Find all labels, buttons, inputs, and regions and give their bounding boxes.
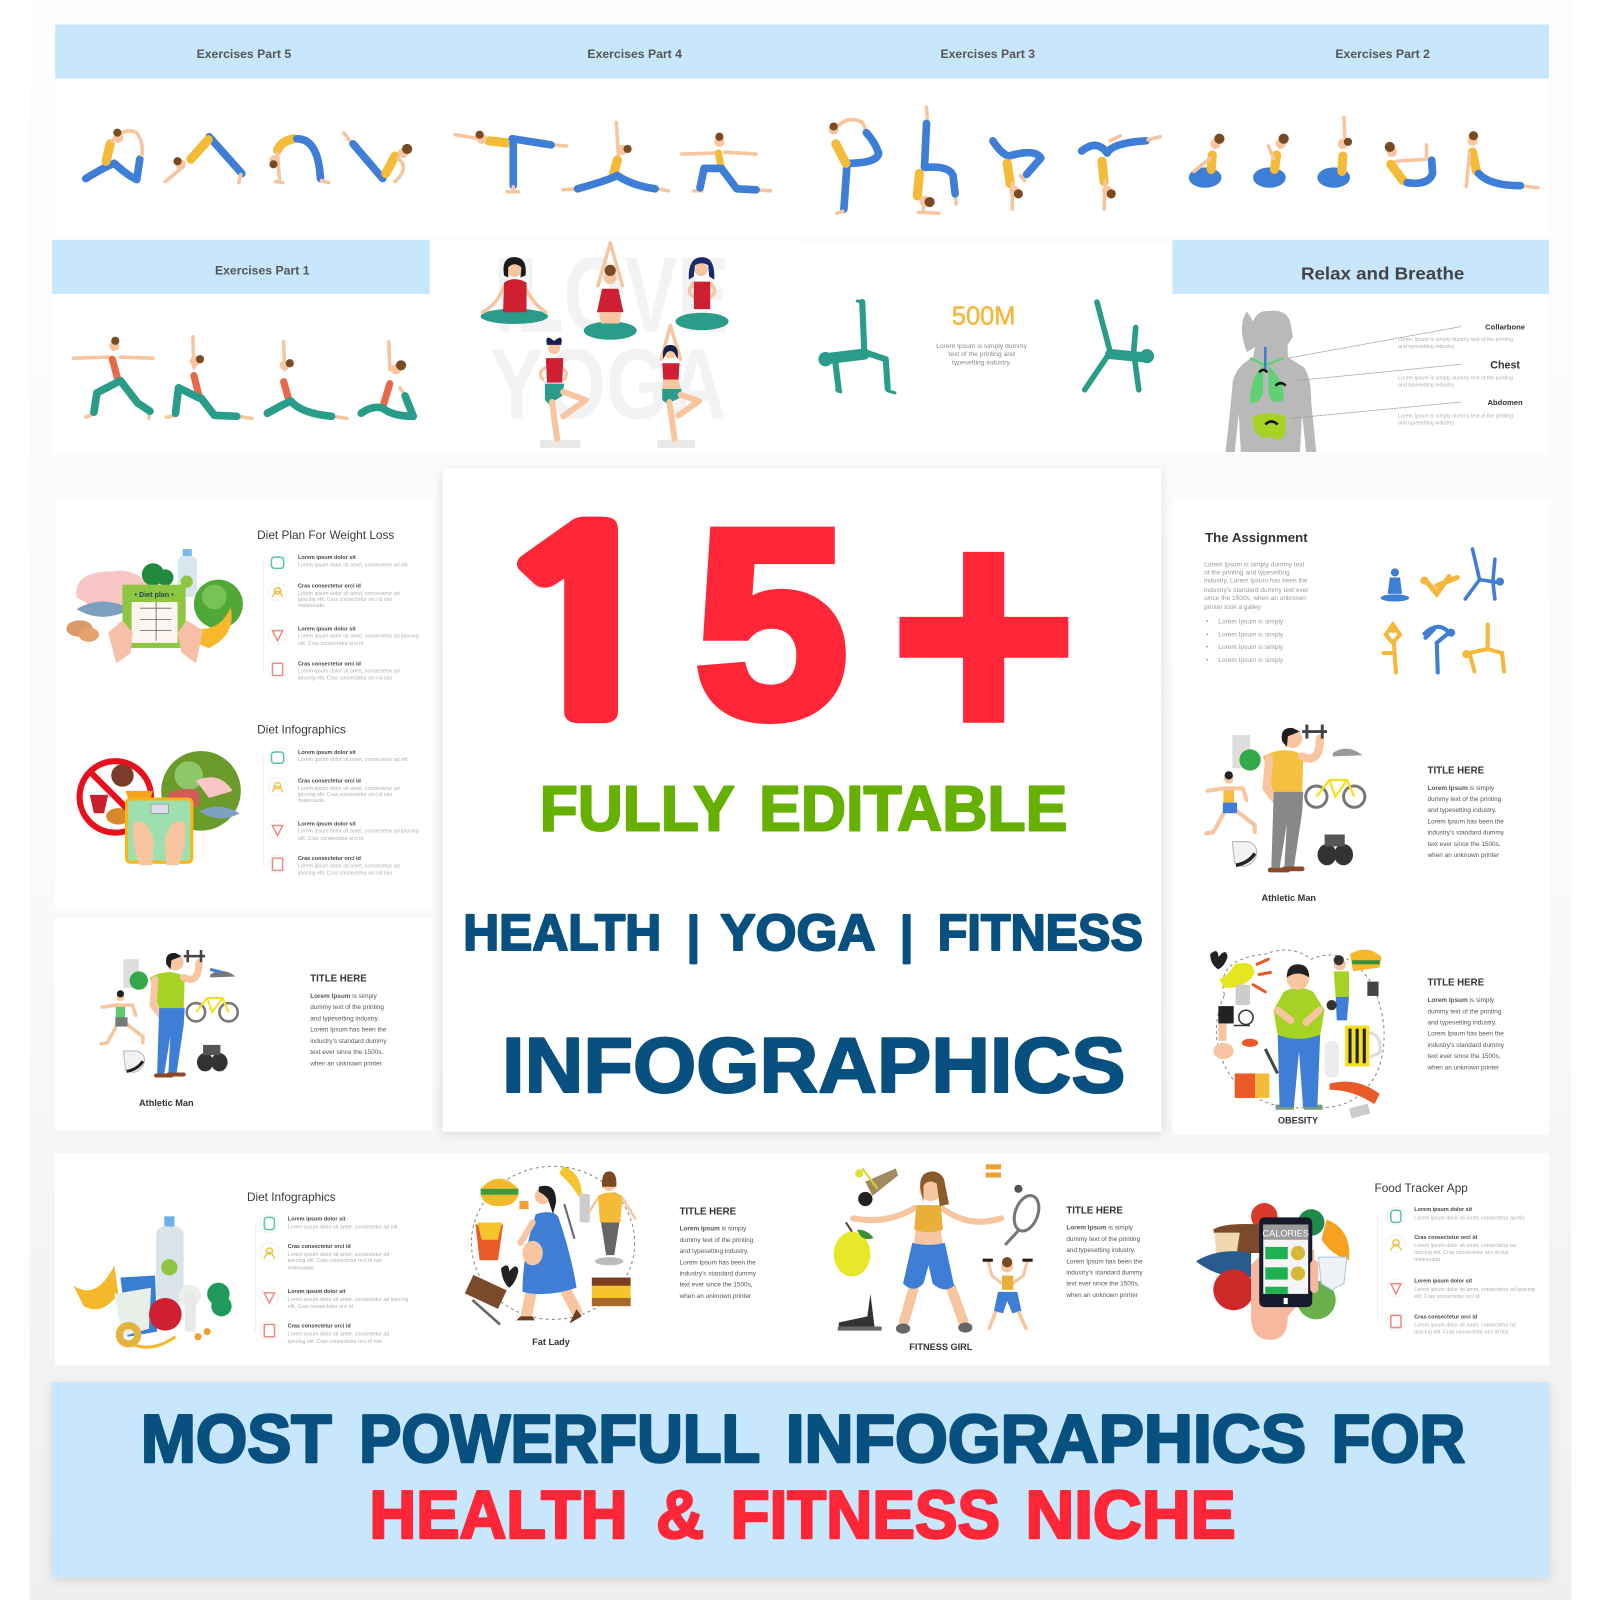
text block: diet infographics bottom: Lorem ipsum dolor sit (288, 1216, 346, 1222)
text block: diet infographics bottom: ipiscing elit. Cras consectetur orci id nisi (288, 1339, 382, 1345)
text block: the assignment: Lorem Ipsum is simply dummy text (1204, 561, 1305, 568)
panel: 500M stat (801, 243, 1172, 454)
text block: food tracker app: ipiscing elit. Cras consectetur orci id nisi (1414, 1250, 1508, 1256)
text block: diet infographics bottom: Cras consectetur orci id (288, 1324, 351, 1330)
text block: diet infographics: Lorem ipsum dolor sit (298, 750, 356, 756)
panel: bottom row (55, 1153, 1549, 1365)
text block: food tracker app: Food Tracker App (1374, 1181, 1468, 1195)
stat description: typesetting industry. (952, 359, 1011, 366)
text block: title here: when an unknown printer (309, 1060, 383, 1067)
text block: title here fat lady: Lorem Ipsum is simply (680, 1226, 747, 1233)
subtitle: health yoga fitness: YOGA (720, 904, 876, 961)
text block: title here (309, 974, 387, 1067)
header bar: exercises parts 5 to 2 (55, 24, 1549, 79)
text block: title here fitness girl: Lorem Ipsum has been the (1066, 1258, 1143, 1265)
text block: diet plan for weight loss: Lorem ipsum dolor sit (298, 555, 356, 561)
text block: title here fitness girl: dummy text of the printing (1066, 1236, 1140, 1243)
icons: six yoga silhouettes (1381, 549, 1504, 672)
headline line 1: POWERFULL (359, 1402, 760, 1477)
illustration: diet infographics with scale (80, 751, 241, 865)
subtitle: health yoga fitness: | (687, 906, 700, 964)
text block: title here obesity: dummy text of the printing (1428, 1008, 1502, 1015)
subtitle: health yoga fitness (463, 904, 1143, 964)
text block: title here fitness girl: Lorem Ipsum is simply (1066, 1225, 1134, 1232)
text block: diet plan for weight loss: Diet Plan For Weight Loss (257, 528, 394, 542)
silhouette: left teal yoga pose (818, 301, 895, 393)
stat description: Lorem Ipsum is simply dummy (936, 343, 1028, 350)
callout: collarbone: Lorem Ipsum is simply dummy text of the printing (1398, 337, 1513, 343)
text block: diet infographics: ipiscing elit. Cras consectetur orci id nisi (298, 870, 392, 876)
panel: left column (55, 500, 433, 908)
text block: the assignment: • (1206, 644, 1209, 651)
subtitle: fully editable (540, 773, 1067, 845)
headline line 2: HEALTH (369, 1478, 628, 1553)
text block: diet infographics bottom: ipiscing elit. Cras consectetur orci id nisi (288, 1258, 382, 1264)
text block: title here athletic: and typesetting industry. (1428, 807, 1497, 814)
text block: title here athletic: Lorem Ipsum has been the (1428, 818, 1504, 825)
panel: center headline card (443, 451, 1161, 1132)
big number: 15+: 1 (484, 502, 683, 753)
headline line 1: INFOGRAPHICS (786, 1402, 1306, 1477)
watermark text: I love yoga: YOGA (490, 328, 727, 440)
text block: diet plan for weight loss: Lorem ipsum dolor sit (298, 627, 356, 633)
text block: the assignment: printer took a galley (1204, 604, 1262, 611)
text block: diet infographics: ipiscing elit. Cras consectetur orci id nisi (298, 792, 392, 798)
text block: diet plan for weight loss: Cras consectetur orci id (298, 661, 361, 667)
headline line 1 (141, 1402, 1465, 1477)
text block: diet infographics bottom (247, 1190, 409, 1345)
text block: title here: Lorem Ipsum is simply (310, 993, 378, 1000)
illustration: food tracker app: CALORIES (1263, 1229, 1309, 1239)
illustration: obesity (1210, 950, 1384, 1119)
text block: diet plan for weight loss: ipiscing elit. Cras consectetur orci id nisi (298, 676, 392, 682)
text block: title here: TITLE HERE (310, 974, 367, 985)
callout lines (1288, 327, 1461, 418)
text block: the assignment: • (1206, 657, 1209, 664)
text block: diet infographics: Lorem ipsum dolor sit amet, consectetur ad (298, 863, 400, 869)
illustration: food tracker app (1196, 1203, 1349, 1340)
text block: the assignment: The Assignment (1205, 530, 1308, 545)
text block: diet infographics bottom: Lorem ipsum dolor sit amet, consectetur ad (288, 1332, 389, 1338)
text block: the assignment: industry's standard dummy text ever (1204, 587, 1309, 594)
watermark text: I love yoga: ILOVE (494, 235, 730, 355)
text block: title here: Lorem Ipsum has been the (310, 1027, 387, 1034)
text block: diet plan for weight loss: malesuada. (298, 603, 325, 609)
text block: diet plan for weight loss: Lorem ipsum dolor sit amet, consectetur ad (298, 668, 400, 674)
illustration: fat lady (465, 1166, 636, 1324)
text block: title here fitness girl: TITLE HERE (1066, 1205, 1123, 1216)
headline line 2: FITNESS (731, 1478, 1000, 1553)
panel: top exercises row (55, 24, 1549, 235)
text block: diet infographics: Diet Infographics (257, 723, 346, 737)
text block: diet infographics: malesuada. (298, 798, 325, 804)
text block: title here fat lady: when an unknown printer (679, 1293, 752, 1300)
callout: collarbone: and typesetting industry. (1398, 344, 1455, 350)
text block: title here obesity: TITLE HERE (1428, 978, 1485, 989)
headline line 1: MOST (141, 1402, 332, 1477)
caption: obesity: OBESITY (1278, 1115, 1318, 1125)
text block: diet plan for weight loss: Lorem ipsum dolor sit amet, consectetur ad ipiscing (298, 634, 419, 640)
text block: title here fitness girl: when an unknown printer (1065, 1292, 1139, 1299)
callout: chest: Chest (1490, 359, 1520, 371)
subtitle: health yoga fitness: HEALTH (463, 904, 661, 961)
text block: food tracker app: ipiscing elit. Cras consectetur orci id nisi (1414, 1330, 1508, 1336)
header bar: exercises parts 5 to 2: Exercises Part 5 (197, 47, 291, 61)
caption: athletic man: Athletic Man (139, 1098, 194, 1108)
text block: diet infographics: elit. Cras consectetur orci id (298, 836, 363, 842)
text block: title here fat lady: Lorem Ipsum has been the (680, 1259, 756, 1266)
text block: title here fat lady: and typesetting industry. (680, 1248, 749, 1255)
text block: diet plan for weight loss (257, 528, 419, 682)
panel: love yoga women (439, 235, 801, 454)
callout: abdomen: Abdomen (1487, 398, 1523, 407)
text block: title here fat lady: text ever since the 1500s, (680, 1282, 753, 1289)
text block: title here fat lady: dummy text of the printing (680, 1237, 754, 1244)
text block: title here: industry's standard dummy (310, 1038, 387, 1045)
text block: the assignment: of the printing and typesetting (1204, 569, 1290, 576)
header bar: exercises parts 5 to 2: Exercises Part 3 (940, 47, 1035, 61)
text block: the assignment: Lorem Ipsum is simply (1218, 644, 1284, 651)
illustration: healthy food (73, 1216, 232, 1347)
figure: tree pose woman 4 (540, 338, 586, 448)
header bar: exercises part 1 (52, 240, 430, 294)
text block: title here fat lady: TITLE HERE (680, 1206, 737, 1217)
text block: title here fat lady: industry's standard dummy (680, 1271, 757, 1278)
panel: relax and breathe (1172, 240, 1549, 454)
silhouette: right teal yoga pose (1085, 302, 1154, 390)
text block: title here: and typesetting industry. (310, 1015, 379, 1022)
text block: diet plan for weight loss: Cras consectetur orci id (298, 584, 361, 590)
header bar: relax and breathe (1172, 240, 1549, 294)
text block: title here fitness girl: industry's standard dummy (1066, 1269, 1143, 1276)
headline line 2: & (656, 1478, 704, 1553)
text block: title here obesity: text ever since the 1500s, (1428, 1053, 1501, 1060)
text block: diet plan for weight loss: Lorem ipsum dolor sit amet, consectetur ad elit. (298, 562, 409, 568)
text block: title here athletic: text ever since the 1500s, (1428, 841, 1501, 848)
stat description: text of the printing and (948, 351, 1015, 358)
caption: athletic man right: Athletic Man (1262, 893, 1316, 903)
panel: athletic man green (55, 918, 433, 1131)
text block: title here athletic: when an unknown printer (1427, 852, 1500, 859)
caption: fat lady: Fat Lady (532, 1337, 571, 1347)
text block: title here athletic: TITLE HERE (1428, 765, 1485, 776)
title: infographics: INFOGRAPHICS (502, 1023, 1126, 1109)
text block: food tracker app: Cras consectetur orci id (1414, 1235, 1477, 1241)
callout: abdomen: Lorem Ipsum is simply dummy text of the printing (1398, 413, 1513, 419)
text block: title here obesity: when an unknown printer (1427, 1064, 1500, 1071)
illustration: fitness girl (834, 1164, 1043, 1334)
text block: food tracker app: malesuada. (1414, 1257, 1442, 1263)
text block: food tracker app: Lorem ipsum dolor sit amet, consectetur ad elit. (1414, 1215, 1526, 1221)
text block: diet infographics bottom: Lorem ipsum dolor sit amet, consectetur ad elit. (288, 1225, 399, 1231)
text block: diet infographics bottom: malesuada. (288, 1265, 315, 1271)
text block: the assignment: since the 1500s, when an unknown (1204, 595, 1306, 602)
text block: diet infographics: Lorem ipsum dolor sit amet, consectetur ad elit. (298, 757, 409, 763)
text block: diet plan for weight loss: elit. Cras consectetur orci id (298, 641, 363, 647)
figures: exercises part 3 (829, 107, 1160, 213)
text block: food tracker app: Lorem ipsum dolor sit amet, consectetur ad (1414, 1243, 1516, 1249)
panel: right column (1172, 500, 1549, 1135)
text block: title here obesity: Lorem Ipsum is simply (1428, 997, 1495, 1004)
text block: diet plan for weight loss: ipiscing elit. Cras consectetur orci id nisi (298, 597, 392, 603)
stat description (936, 343, 1028, 366)
headline line 2 (369, 1478, 1236, 1553)
text block: the assignment: Lorem Ipsum is simply (1218, 618, 1284, 625)
watermark text: I love yoga (490, 235, 730, 440)
text block: the assignment: Lorem Ipsum is simply (1218, 632, 1284, 639)
figure: seated woman 3 (676, 257, 729, 330)
figure: tree pose woman 5 (657, 326, 699, 448)
callout: collarbone: Collarbone (1485, 323, 1525, 332)
text block: food tracker app: Lorem ipsum dolor sit amet, consectetur ad (1414, 1323, 1516, 1329)
text block: food tracker app: Lorem ipsum dolor sit (1414, 1279, 1472, 1285)
text block: title here fat lady (679, 1206, 757, 1300)
text block: diet infographics (257, 723, 419, 876)
text block: the assignment: • (1206, 632, 1209, 639)
text block: food tracker app: elit. Cras consectetur orci id (1414, 1294, 1480, 1300)
big number: 15+ (484, 451, 1079, 816)
headline line 1: FOR (1332, 1402, 1465, 1477)
text block: diet infographics: Lorem ipsum dolor sit amet, consectetur ad (298, 786, 400, 792)
figures: exercises part 4 (455, 122, 770, 192)
callout: abdomen: and typesetting industry. (1398, 420, 1455, 426)
text block: diet infographics bottom: Diet Infographics (247, 1190, 336, 1204)
text block: diet infographics bottom: Lorem ipsum dolor sit amet, consectetur ad ipiscing (288, 1297, 409, 1303)
figure: seated woman 1 (481, 257, 548, 324)
stat: 500M: 500M (952, 302, 1016, 330)
text block: title here athletic: Lorem Ipsum is simply (1428, 785, 1495, 792)
subtitle: health yoga fitness: FITNESS (938, 904, 1143, 961)
caption: fitness girl: FITNESS GIRL (909, 1342, 973, 1352)
figures: exercises part 2 (1189, 117, 1538, 188)
callout: chest: and typesetting industry. (1398, 383, 1455, 389)
text block: food tracker app: Lorem ipsum dolor sit (1414, 1207, 1472, 1213)
figure: seated woman 2 arms raised (584, 243, 637, 340)
illustration: diet plan: • Diet plan • (135, 591, 174, 599)
text block: diet infographics: Cras consectetur orci id (298, 856, 361, 862)
text block: title here athletic: industry's standard dummy (1428, 830, 1505, 837)
callout: collarbone (1398, 323, 1525, 350)
text block: diet infographics bottom: elit. Cras consectetur orci id (288, 1304, 353, 1310)
text block: title here fitness girl: text ever since the 1500s, (1066, 1281, 1140, 1288)
text block: diet infographics bottom: Lorem ipsum dolor sit amet, consectetur ad (288, 1252, 389, 1258)
text block: diet infographics: Lorem ipsum dolor sit (298, 822, 356, 828)
header bar: exercises parts 5 to 2: Exercises Part 4 (587, 47, 682, 61)
callout: abdomen (1398, 398, 1523, 426)
callout: chest (1398, 359, 1520, 389)
diagram: body silhouette with lungs (1226, 311, 1316, 452)
text block: food tracker app: Cras consectetur orci id (1414, 1314, 1477, 1320)
panel: exercises part 1 (52, 240, 440, 454)
text block: diet infographics: Lorem ipsum dolor sit amet, consectetur ad ipiscing (298, 829, 419, 835)
text block: title here obesity (1427, 978, 1505, 1071)
header bar: relax and breathe: Relax and Breathe (1301, 264, 1465, 284)
text block: diet infographics bottom: Cras consectetur orci id (288, 1244, 351, 1250)
subtitle: fully editable: FULLY (540, 773, 735, 845)
illustration: diet plan (66, 549, 243, 663)
headline line 2: NICHE (1026, 1478, 1236, 1553)
illustration: athletic man (101, 950, 238, 1076)
text block: diet infographics bottom: Lorem ipsum dolor sit (288, 1289, 346, 1295)
header bar: exercises parts 5 to 2: Exercises Part 2 (1335, 47, 1430, 61)
text block: the assignment: Lorem Ipsum is simply (1218, 657, 1284, 664)
banner: bottom headline (52, 1383, 1549, 1578)
callout: chest: Lorem Ipsum is simply dummy text of the printing (1398, 376, 1513, 382)
text block: the assignment (1204, 530, 1309, 664)
text block: title here fitness girl: and typesetting industry. (1066, 1247, 1136, 1254)
text block: title here: text ever since the 1500s, (310, 1049, 383, 1056)
figures: teal yoga poses (73, 337, 413, 418)
subtitle: fully editable: EDITABLE (759, 773, 1067, 845)
subtitle: health yoga fitness: | (900, 906, 913, 964)
text block: title here: dummy text of the printing (310, 1004, 384, 1011)
illustration: athletic man yellow (1206, 724, 1365, 870)
text block: title here obesity: Lorem Ipsum has been the (1428, 1031, 1504, 1038)
text block: diet infographics: Cras consectetur orci id (298, 779, 361, 785)
text block: title here obesity: and typesetting industry. (1428, 1019, 1497, 1026)
text block: diet plan for weight loss: Lorem ipsum dolor sit amet, consectetur ad (298, 591, 400, 597)
big number: 15+: 5 (695, 473, 848, 773)
text block: the assignment: industry. Lorem Ipsum has been the (1204, 578, 1308, 585)
text block: title here fitness girl (1065, 1205, 1143, 1299)
text block: food tracker app (1374, 1181, 1535, 1336)
header bar: exercises part 1: Exercises Part 1 (215, 263, 310, 277)
text block: the assignment: • (1206, 618, 1209, 625)
text block: title here athletic (1427, 765, 1505, 859)
text block: food tracker app: Lorem ipsum dolor sit amet, consectetur ad ipiscing (1414, 1287, 1535, 1293)
figures: exercises part 5 (86, 129, 412, 183)
big number: 15+: + (888, 451, 1079, 816)
text block: title here obesity: industry's standard dummy (1428, 1042, 1505, 1049)
text block: title here athletic: dummy text of the printing (1428, 796, 1502, 803)
